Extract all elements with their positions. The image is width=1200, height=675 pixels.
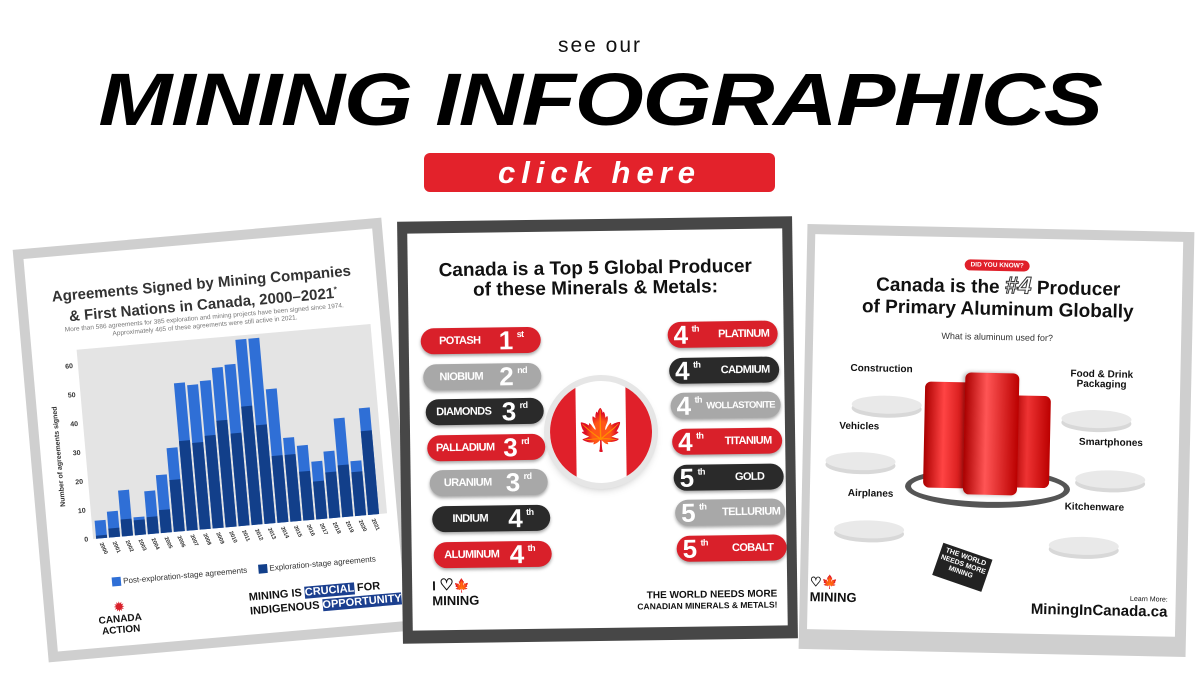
bar chart: 10 [78,508,86,515]
button: click here: click here [498,155,701,190]
labels: uses: Packaging [1076,379,1127,391]
bar chart: 2009 [214,532,225,545]
heading: top 5 producer: of these Minerals & Metals: [473,276,718,301]
bar chart: 2019 [344,520,354,534]
list: left minerals: 1 [499,325,513,355]
bar chart: 40 [70,421,79,429]
logo: Canada Action: ACTION [102,623,141,638]
icon: canada flag circle: 🍁 [576,409,626,453]
bar chart: 2004 [150,537,161,552]
bar chart: 2012 [253,528,264,542]
heading: top 5 producer [438,256,752,301]
logo: I love mining: MINING [810,589,857,605]
list: right minerals: th [698,467,705,477]
labels: uses: Construction [850,363,913,375]
callout: world needs more [637,589,778,611]
list: left minerals: DIAMONDS [436,405,491,418]
legend: Post-exploration-stage agreements Exploration-stage agreements [123,554,376,586]
heading: see our: see our [558,34,642,57]
list: right minerals: 5 [679,463,694,493]
text: what is aluminum used for: What is aluminum used for? [941,331,1053,343]
logo: Canada Action: ✹ [114,600,125,614]
panel: top 5 producer card [397,216,798,644]
bar chart: 0 [84,536,89,544]
heading: agreements title: Agreements Signed by Mining Companies [51,263,352,306]
bar chart: 2016 [305,524,316,537]
link: MiningInCanada.ca: MiningInCanada.ca [1031,601,1168,621]
heading: #4 aluminum [862,272,1134,323]
icon: world needs more mining sign: THE WORLD NEEDS MORE MINING [940,547,987,580]
logo: I love mining [810,574,857,605]
list: left minerals: th [528,543,535,553]
list: right minerals: th [695,395,702,405]
logo: I love mining: I ♡🍁 [432,577,470,594]
labels: uses: Smartphones [1079,437,1143,449]
heading: agreements title [51,263,352,325]
list: right minerals: th [696,431,703,441]
list: left minerals: st [517,329,524,339]
list: right minerals: th [701,537,708,548]
icon: red cans [923,370,1051,498]
list: right minerals: TELLURIUM [722,505,780,518]
list: right minerals: CADMIUM [721,364,770,376]
bar chart: 2017 [318,523,329,536]
callout: world needs more: THE WORLD NEEDS MORE [647,589,777,601]
button: click here [424,153,775,192]
list: right minerals: 4 [675,356,689,386]
logo: Canada Action: CANADA [98,612,142,627]
heading: agreements title: & First Nations in Canada, 2000–2021* [68,285,337,325]
list: right minerals [666,320,788,566]
list: right minerals: th [693,360,700,370]
list: left minerals: rd [521,436,529,446]
list: left minerals: rd [524,471,532,481]
heading: #4 aluminum: Canada is the #4 Producer [876,272,1121,301]
list: left minerals: NIOBIUM [439,371,483,383]
list: left minerals: th [526,507,534,517]
list: left minerals: nd [517,365,527,375]
list: left minerals: 2 [499,361,513,391]
bar chart: 2003 [137,538,147,552]
labels: uses: Food & Drink [1070,369,1133,381]
logo: I love mining [432,577,479,608]
bar chart: 2005 [163,536,173,550]
panel: agreements chart card [13,218,417,662]
bar chart: 50 [68,392,76,400]
bar chart: 2007 [188,534,199,547]
list: left minerals [419,325,554,572]
list: right minerals: TITANIUM [725,435,772,447]
list: right minerals: 4 [676,391,691,421]
list: left minerals: POTASH [439,335,481,347]
labels: uses: Vehicles [839,421,879,433]
heading: #4 aluminum: of Primary Aluminum Globally [862,296,1134,323]
badge: did you know: DID YOU KNOW? [970,261,1024,270]
panel: aluminum card [799,224,1194,657]
callout: mining is crucial: INDIGENOUS OPPORTUNITY [250,592,402,618]
bar chart: 2010 [227,530,238,544]
badge: did you know [965,259,1030,272]
list: left minerals: PALLADIUM [436,441,495,454]
list: left minerals: 3 [503,432,517,462]
callout: world needs more: CANADIAN MINERALS & METALS! [637,600,778,611]
bar chart [51,324,387,555]
text: subtitle: Approximately 465 of these agreements were still active in 2021. [112,314,298,338]
bar chart: 2021 [370,518,380,532]
icon: world needs more mining sign [932,543,992,592]
list: left minerals: INDIUM [452,513,488,525]
bar chart: 60 [65,363,73,371]
bar chart: 2014 [279,526,290,540]
heading: top 5 producer: Canada is a Top 5 Global Producer [438,256,752,281]
list: left minerals: 4 [508,503,522,533]
icon: canada flag circle [549,380,653,484]
bar chart: 2002 [124,539,134,553]
list: right minerals: PLATINUM [718,328,769,340]
labels: uses [839,363,1143,514]
pedestals [826,396,1145,559]
list: right minerals: COBALT [732,542,773,554]
bar chart: 30 [73,450,81,457]
callout: mining is crucial [248,580,402,618]
list: left minerals: 4 [510,539,524,569]
list: left minerals: rd [520,400,528,410]
list: right minerals: th [699,501,706,512]
list: right minerals: 4 [678,427,692,457]
callout: mining is crucial: MINING IS CRUCIAL FOR [248,580,381,604]
bar chart: 2001 [111,541,121,554]
list: right minerals: WOLLASTONITE [706,399,775,411]
logo: I love mining: MINING [432,593,479,608]
bar chart: 2018 [331,521,341,535]
bar chart: 2000 [98,542,108,555]
link: MiningInCanada.ca: Learn More: [1130,596,1168,604]
list: left minerals: 3 [506,467,520,497]
logo: I love mining: ♡🍁 [810,574,838,590]
list: right minerals: 5 [682,534,697,564]
list: left minerals: ALUMINUM [444,548,499,561]
labels: uses: Kitchenware [1065,501,1124,514]
labels: uses: Airplanes [848,488,894,500]
list: left minerals: 3 [502,396,516,426]
list: right minerals: GOLD [735,471,764,483]
logo: Canada Action [98,600,142,638]
title: MINING INFOGRAPHICS: MINING INFOGRAPHICS [98,58,1102,141]
list: right minerals: 5 [681,498,695,528]
bar chart: 2020 [357,519,367,533]
bar chart: 2013 [266,527,277,541]
text: subtitle: More than 586 agreements for 385 exploration and mining projects have been signed since 1974. [65,302,344,334]
bar chart: Number of agreements signed [51,406,67,507]
bar chart: 2015 [292,525,303,538]
list: right minerals: th [692,324,699,334]
bar chart: 2011 [240,529,251,543]
bar chart: 20 [75,479,84,486]
list: left minerals: URANIUM [444,476,492,489]
bar chart: 2008 [201,533,212,546]
list: right minerals: 4 [673,320,688,350]
bar chart: 2006 [175,535,186,549]
